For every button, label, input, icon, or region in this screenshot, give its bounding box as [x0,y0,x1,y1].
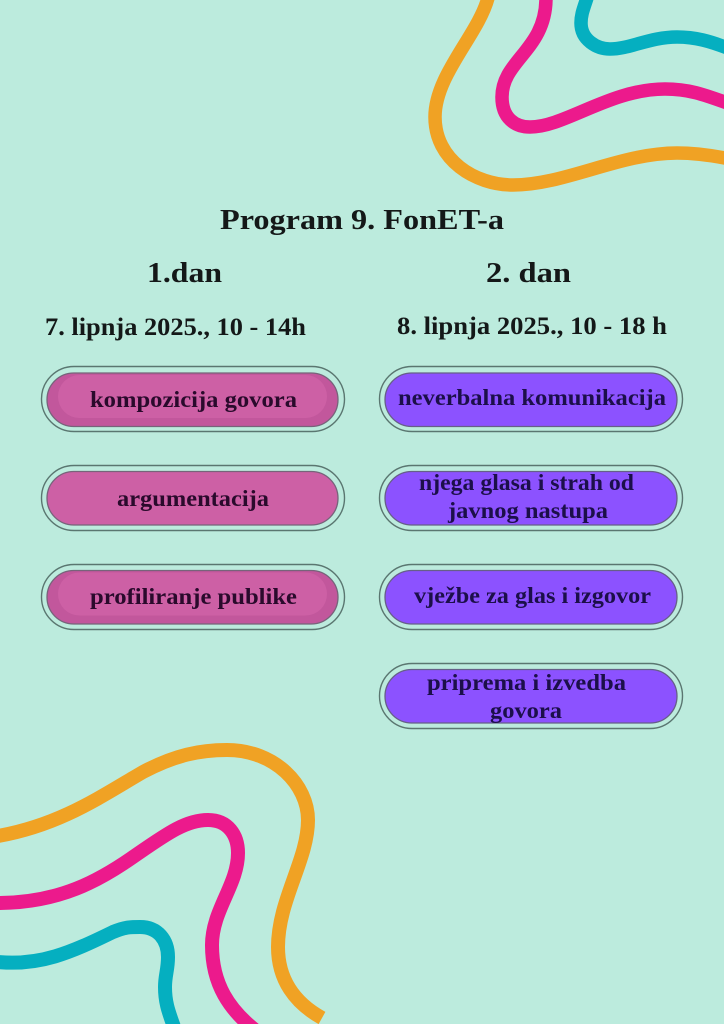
pill: vježbe za glas i izgovor: vježbe za glas i izgovor [414,583,651,608]
date: day 2: 8. lipnja 2025., 10 - 18 h [397,313,667,340]
pill: priprema i izvedba govora [380,664,682,728]
pill: njega glasa i strah od javnog nastupa: njega glasa i strah od [419,470,634,495]
pill: kompozicija govora [42,366,344,432]
heading: day 2: 2. dan [486,257,571,289]
decorative curves: bottom left [0,750,322,1024]
panel: day 1 sessions [42,366,344,630]
pill: neverbalna komunikacija: neverbalna komunikacija [398,385,667,410]
pill: kompozicija govora: kompozicija govora [90,387,298,412]
pill: argumentacija: argumentacija [117,486,270,511]
pill: priprema i izvedba govora: priprema i izvedba [427,670,627,695]
pill: profiliranje publike: profiliranje publike [90,584,297,609]
pill: njega glasa i strah od javnog nastupa: javnog nastupa [447,498,609,523]
decorative curves: top right [435,0,724,185]
pill: vježbe za glas i izgovor [380,564,682,630]
title: Program 9. FonET-a [220,204,505,236]
date: day 1: 7. lipnja 2025., 10 - 14h [45,314,306,341]
pill: profiliranje publike [42,564,344,630]
pill: priprema i izvedba govora: govora [490,698,563,723]
pill: njega glasa i strah od javnog nastupa [380,466,682,530]
panel: day 2 sessions [380,366,682,728]
pill: neverbalna komunikacija [380,366,682,432]
pill: argumentacija [42,466,344,530]
heading: day 1: 1.dan [147,257,222,289]
